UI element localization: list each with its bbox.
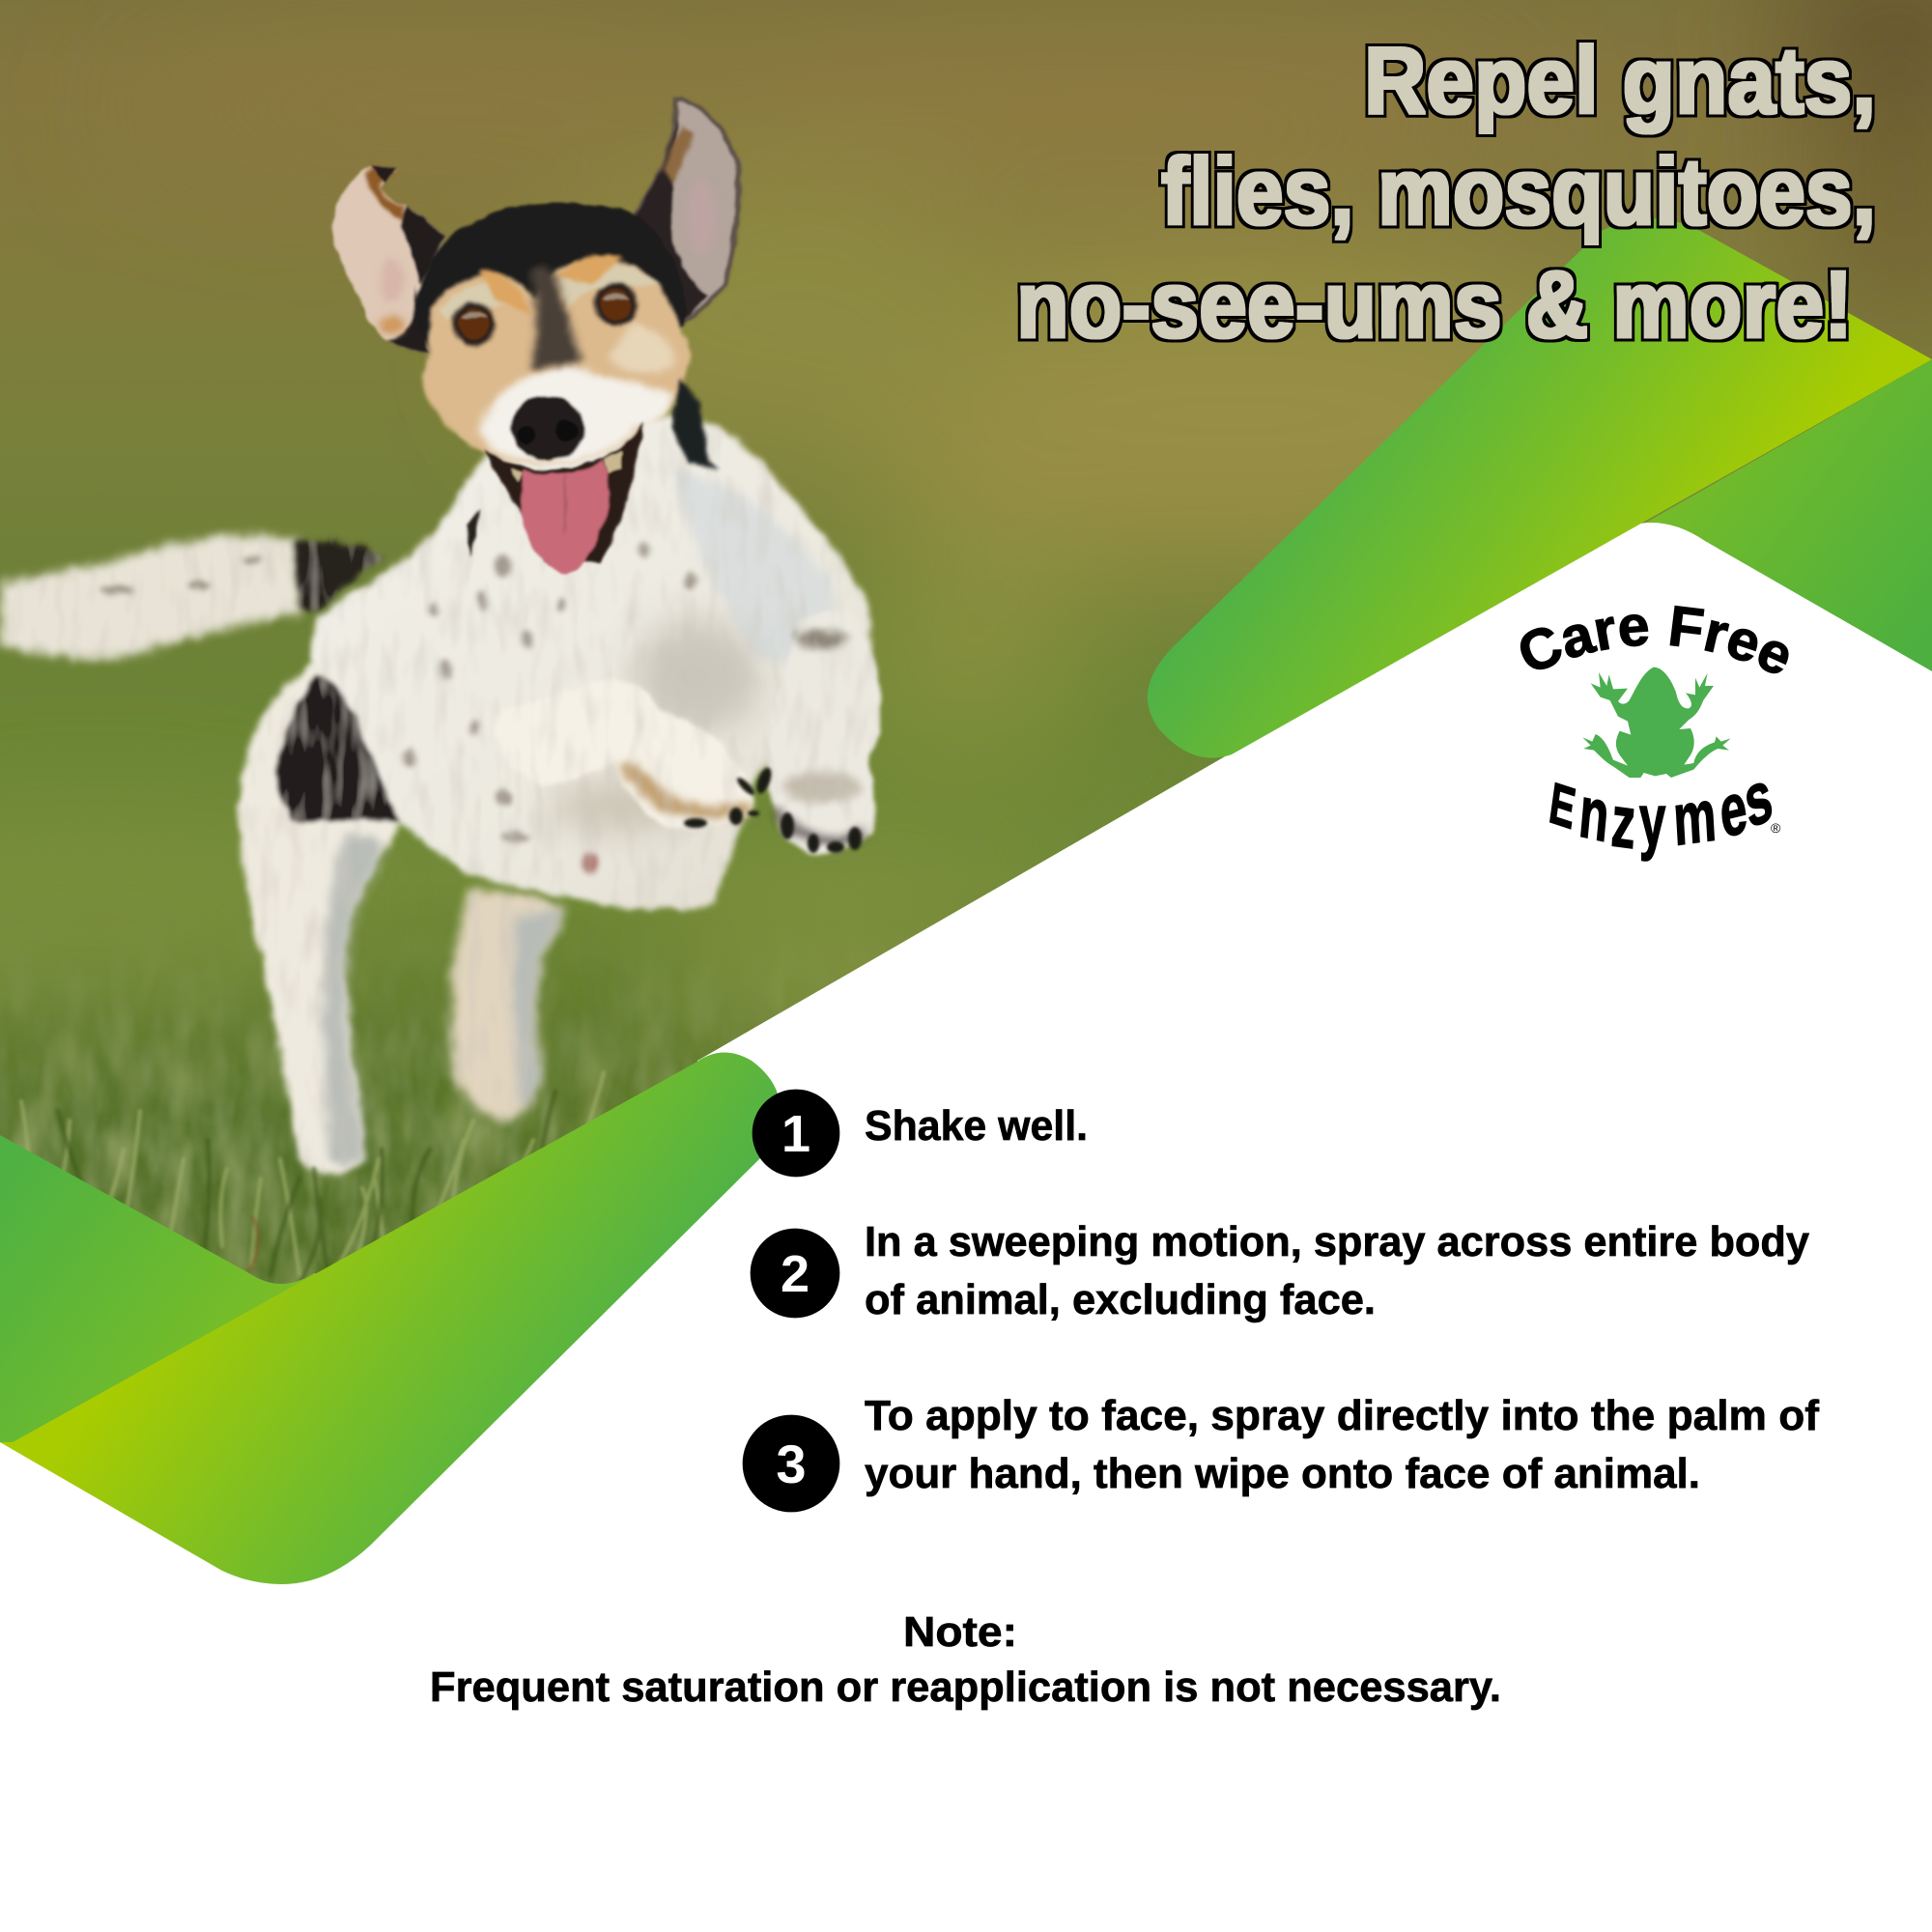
step 1: Shake well. (865, 1102, 1088, 1150)
title (1016, 27, 1876, 357)
title: Repel gnats, (1364, 27, 1876, 133)
step 2: of animal, excluding face. (865, 1276, 1376, 1323)
tongue (520, 458, 611, 574)
foreground grass blades (21, 1072, 604, 1285)
fur speckles (99, 543, 836, 842)
note (430, 1608, 1501, 1711)
green chevron: top main (1148, 218, 1932, 758)
step 2 (751, 1218, 1810, 1323)
green chevron: top right back (1546, 359, 1932, 773)
dog head (331, 99, 739, 574)
note: Frequent saturation or reapplication is not necessary. (430, 1663, 1501, 1711)
eyes (453, 303, 496, 346)
step 1: 1 (781, 1105, 810, 1163)
step 2: 2 (781, 1245, 810, 1303)
muzzle white (479, 366, 673, 464)
left ear (331, 164, 445, 355)
note: Note: (903, 1608, 1017, 1656)
paw claws (684, 766, 862, 853)
title: no-see-ums & more! (1016, 251, 1853, 357)
step 3: 3 (776, 1434, 807, 1494)
registered mark: ® (1771, 820, 1781, 836)
mouth (485, 421, 643, 562)
logo: Care Free Enzymes (1520, 605, 1789, 865)
step 2: In a sweeping motion, spray across entire body (865, 1218, 1810, 1265)
black head cap (414, 203, 686, 358)
photo: jumping dog (0, 99, 880, 1285)
white content panel (0, 523, 1932, 1932)
logo wordmark: Enzymes: Enzymes (1546, 753, 1777, 865)
dog tail and body (0, 416, 880, 1174)
step 3: your hand, then wipe onto face of animal. (865, 1450, 1700, 1497)
black hip patch (276, 675, 398, 823)
right ear (637, 99, 739, 322)
step 3 (743, 1392, 1819, 1512)
icon: frog (1582, 668, 1731, 778)
chest shading (633, 618, 758, 734)
step 1 (753, 1090, 1088, 1177)
steps list (743, 1090, 1819, 1512)
logo wordmark: Care Free (1520, 605, 1789, 674)
step 3: To apply to face, spray directly into the palm of (865, 1392, 1819, 1439)
nose (512, 395, 583, 461)
forehead stripe (530, 267, 582, 370)
photo: blurred meadow background (0, 0, 1932, 1284)
tan face (423, 259, 691, 465)
front arm and paw far (768, 609, 880, 853)
neck patches (671, 377, 720, 469)
green chevron: bottom left back (0, 1135, 328, 1444)
green chevron: bottom main (0, 1052, 781, 1584)
front arm and paw near (493, 679, 753, 829)
logo wordmark: Care Free: Care Free (1520, 605, 1789, 674)
